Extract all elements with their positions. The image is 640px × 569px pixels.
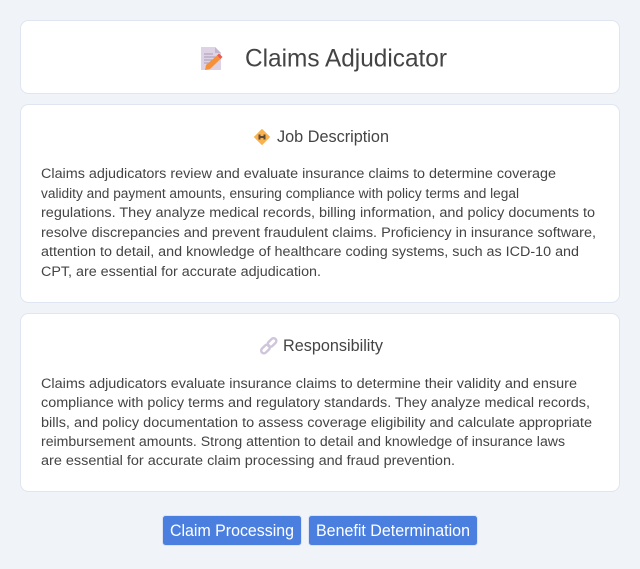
panel: responsibility: [20, 314, 620, 492]
text block: responsibility: bills, and policy documentation to assess coverage eligibility and calculate appropriate: [41, 415, 592, 431]
text block: responsibility: [41, 376, 592, 469]
tag: benefit determination: [308, 516, 478, 546]
panel: header: [20, 20, 620, 94]
text block: job description: resolve discrepancies and prevent fraudulent claims. Proficiency in insurance software,: [41, 225, 596, 241]
text block: job description: attention to detail, and knowledge of healthcare coding systems, such as ICD-10 and: [41, 244, 579, 260]
text block: job description: Claims adjudicators review and evaluate insurance claims to determine coverage: [41, 166, 556, 182]
icon: chain link: [260, 337, 277, 354]
tag: claim processing: [162, 516, 302, 546]
text block: responsibility: compliance with policy terms and regulatory standards. They analyze medical records,: [41, 395, 590, 411]
text block: job description: CPT, are essential for accurate adjudication.: [41, 264, 321, 280]
text block: responsibility: Claims adjudicators evaluate insurance claims to determine their validity and ensure: [41, 376, 577, 392]
text block: responsibility: reimbursement amounts. Strong attention to detail and knowledge of insurance laws: [41, 434, 565, 450]
text block: job description: validity and payment amounts, ensuring compliance with policy terms and legal: [41, 186, 519, 202]
title: Claims Adjudicator: [245, 44, 447, 72]
panel: job description: [20, 104, 620, 302]
tag: claim processing: Claim Processing: [170, 522, 294, 540]
icon: orange diamond sign: [254, 130, 270, 144]
heading: job description: Job Description: [277, 128, 389, 146]
text block: responsibility: are essential for accurate claim processing and fraud prevention.: [41, 453, 455, 469]
tag: benefit determination: Benefit Determination: [316, 522, 470, 540]
icon: document with pencil: [201, 47, 222, 70]
heading: responsibility: Responsibility: [283, 337, 384, 355]
text block: job description: [41, 166, 596, 280]
text block: job description: regulations. They analyze medical records, billing information, and policy documents to: [41, 205, 595, 221]
